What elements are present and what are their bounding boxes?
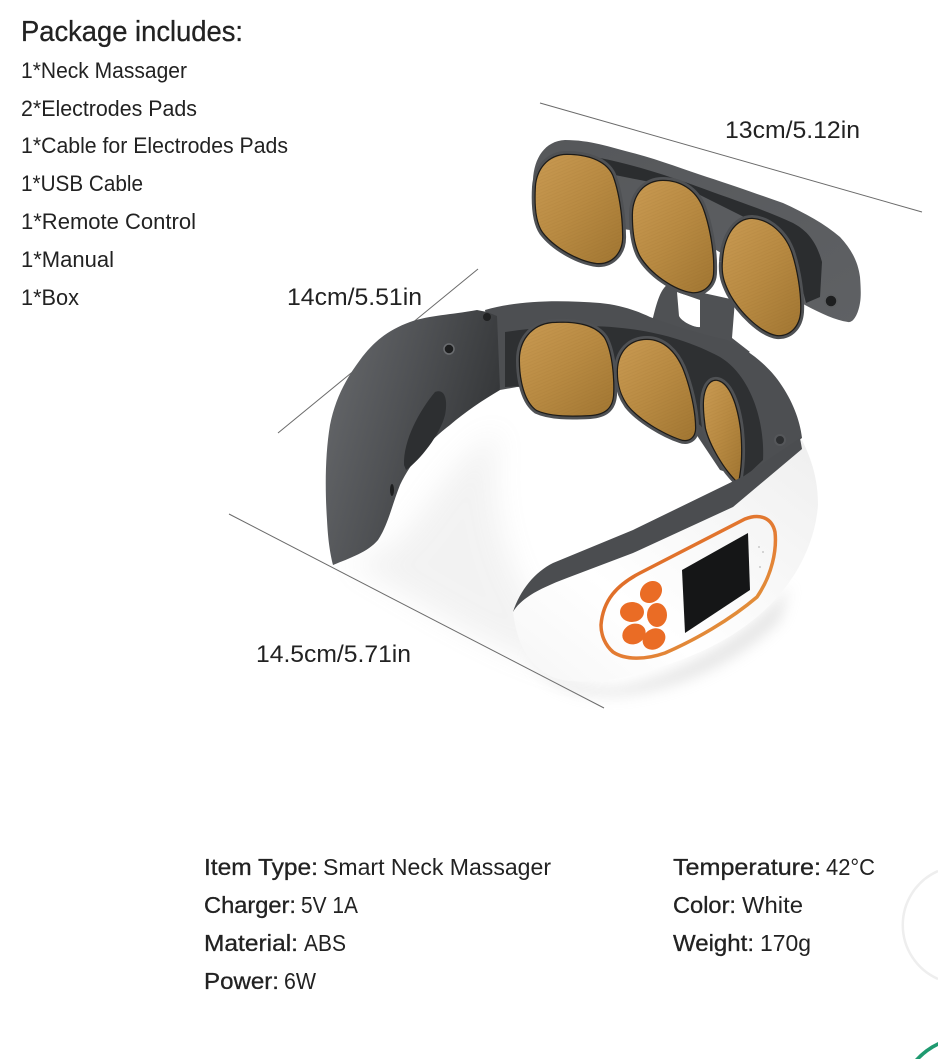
product photo: neck massager <box>326 140 861 695</box>
specifications: right column: White <box>742 892 803 918</box>
specifications: right column: Temperature: <box>673 854 821 880</box>
dimension line: top width <box>540 103 922 212</box>
package contents list: 1*USB Cable <box>21 171 143 196</box>
lower pad 1 <box>520 323 613 415</box>
specifications: left column: 5V 1A <box>301 892 359 918</box>
upper electrode bar <box>533 140 861 322</box>
specifications: right column: Weight: <box>673 930 754 956</box>
package contents list: 2*Electrodes Pads <box>21 96 197 121</box>
dimension line: bottom width <box>229 514 604 708</box>
dark band above housing <box>513 438 802 612</box>
button down <box>638 624 670 654</box>
upper pad 1 <box>536 155 622 263</box>
LCD screen <box>682 533 750 633</box>
package contents list: 1*Cable for Electrodes Pads <box>21 133 288 158</box>
specifications: left column: Smart Neck Massager <box>323 854 551 880</box>
left dark neck arm <box>326 310 500 565</box>
specifications: left column: ABS <box>304 930 346 956</box>
hinge pin <box>483 313 491 321</box>
button up <box>635 576 667 608</box>
package contents list: 1*Neck Massager <box>21 58 187 83</box>
specifications: left column: Charger: <box>204 892 296 918</box>
specifications: right column <box>673 854 875 956</box>
lower pad 2 <box>618 340 695 440</box>
package contents list: 1*Remote Control <box>21 209 196 234</box>
specifications: left column: Material: <box>204 930 298 956</box>
arm small hole <box>390 484 394 496</box>
dimension line: depth <box>278 269 478 433</box>
indicator dots <box>758 546 764 568</box>
neck band back section <box>485 301 802 478</box>
orange ring <box>601 517 775 658</box>
arm screw hole <box>444 344 454 354</box>
upper pad 2 <box>633 181 713 292</box>
package contents list: 1*Box <box>21 285 79 310</box>
inner band shadow <box>505 326 763 478</box>
stem opening <box>677 292 700 327</box>
specifications: right column: Color: <box>673 892 736 918</box>
connecting stem <box>640 285 750 372</box>
dimension label: 14.5cm: 14.5cm/5.71in <box>256 641 411 668</box>
specifications: left column: Item Type: <box>204 854 318 880</box>
button menu <box>619 620 649 648</box>
lower pad 3 <box>704 381 741 482</box>
bolt <box>825 295 837 307</box>
specifications: left column: Power: <box>204 968 279 994</box>
green circular button edge <box>915 1042 938 1059</box>
button right <box>647 603 667 627</box>
specifications: left column <box>204 854 551 994</box>
specifications: left column: 6W <box>284 968 316 994</box>
arm side slot <box>404 391 446 470</box>
dimension label: 14cm: 14cm/5.51in <box>287 284 422 311</box>
floating round button at right edge <box>903 871 938 979</box>
specifications: right column: 42°C <box>826 854 875 880</box>
control panel <box>601 517 775 658</box>
heading: package includes: Package includes: <box>21 16 243 48</box>
specifications: right column: 170g <box>760 930 811 956</box>
housing shadow <box>525 585 790 695</box>
front white control housing <box>513 440 818 682</box>
right hinge <box>775 435 785 445</box>
package contents list: 1*Manual <box>21 247 114 272</box>
device shadow <box>345 430 600 680</box>
dimension label: 13cm: 13cm/5.12in <box>725 117 860 144</box>
upper pad 3 <box>723 219 800 335</box>
button left <box>620 602 644 622</box>
package contents list <box>21 58 288 310</box>
